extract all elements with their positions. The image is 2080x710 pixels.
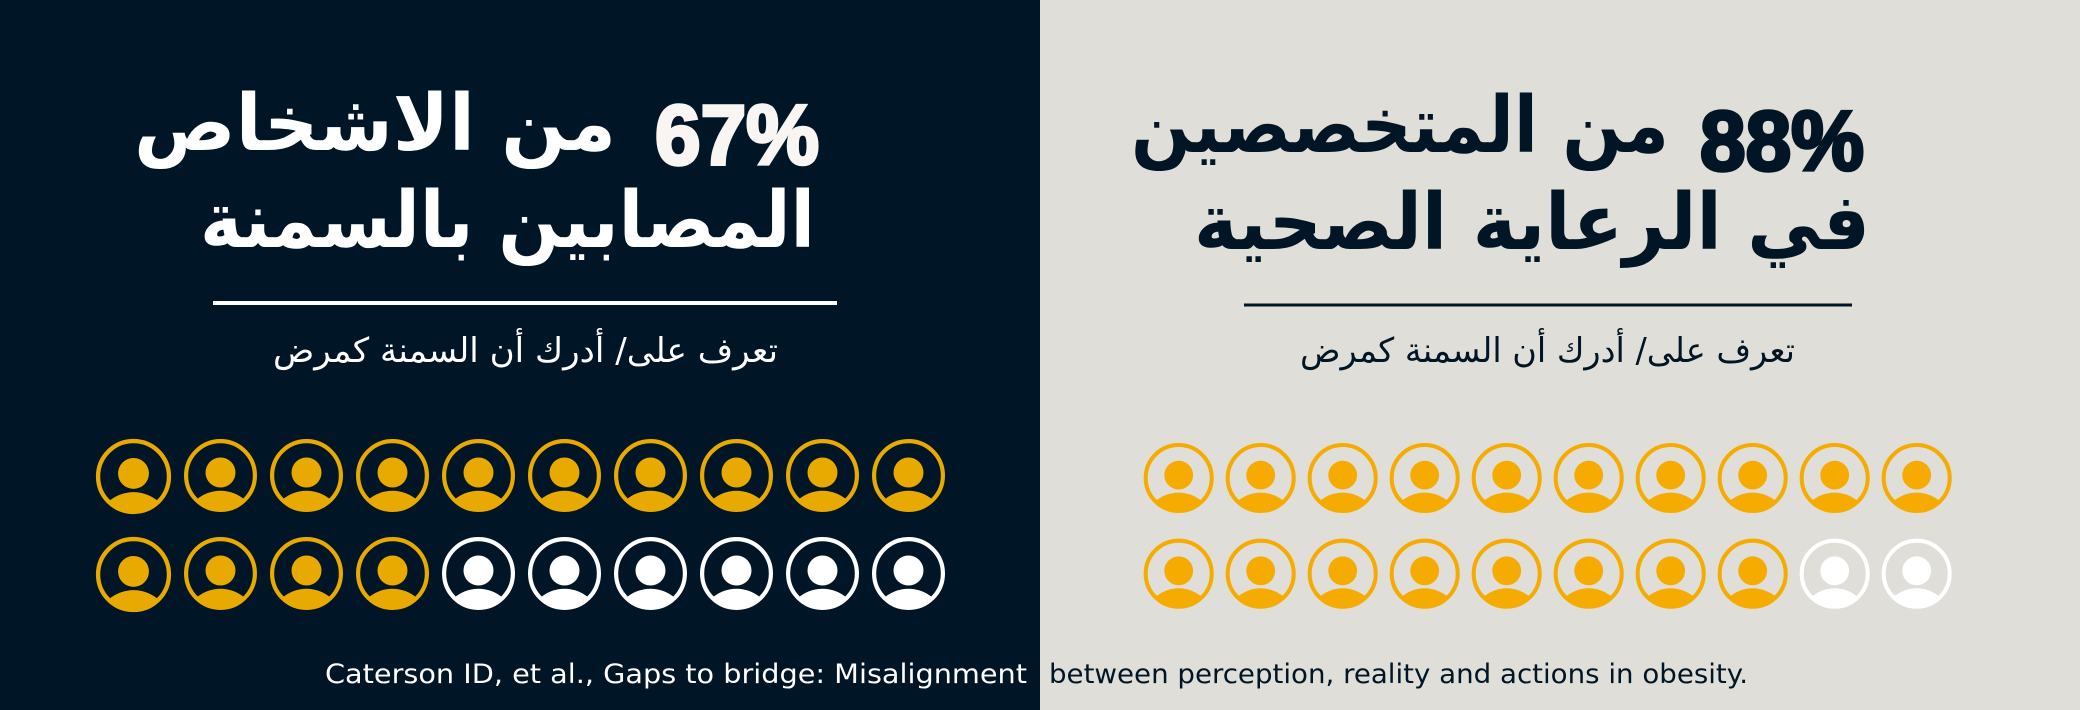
heading: professionals line 1 xyxy=(1131,81,1864,188)
heading: professionals line 2: في الرعاية الصحية xyxy=(1194,178,1870,268)
heading: patients line 1 xyxy=(134,79,819,182)
panel: healthcare professionals xyxy=(1040,0,2080,710)
icon row 1: professionals xyxy=(1146,445,1950,511)
heading: patients line 1: من الاشخاص xyxy=(134,79,616,169)
icon row 1: patients xyxy=(98,441,943,512)
heading: professionals line 1: 88% xyxy=(1700,94,1864,188)
subheading: تعرف على/ أدرك أن السمنة كمرض xyxy=(273,328,778,371)
citation: Caterson ID, et al., Gaps to bridge: Misalignment xyxy=(325,659,1027,690)
subheading: تعرف على/ أدرك أن السمنة كمرض xyxy=(1300,328,1795,371)
heading: patients line 2: المصابين بالسمنة xyxy=(200,176,815,266)
heading: patients line 1: 67% xyxy=(655,88,819,182)
heading: professionals line 1: من المتخصصين xyxy=(1131,81,1669,171)
icon row 2: professionals xyxy=(1146,541,1950,607)
divider xyxy=(213,301,837,305)
divider xyxy=(1244,304,1852,306)
panel: patients xyxy=(0,0,1040,710)
citation xyxy=(325,659,1748,690)
citation: between perception, reality and actions in obesity. xyxy=(1049,659,1748,690)
icon row 2: patients xyxy=(98,539,943,610)
